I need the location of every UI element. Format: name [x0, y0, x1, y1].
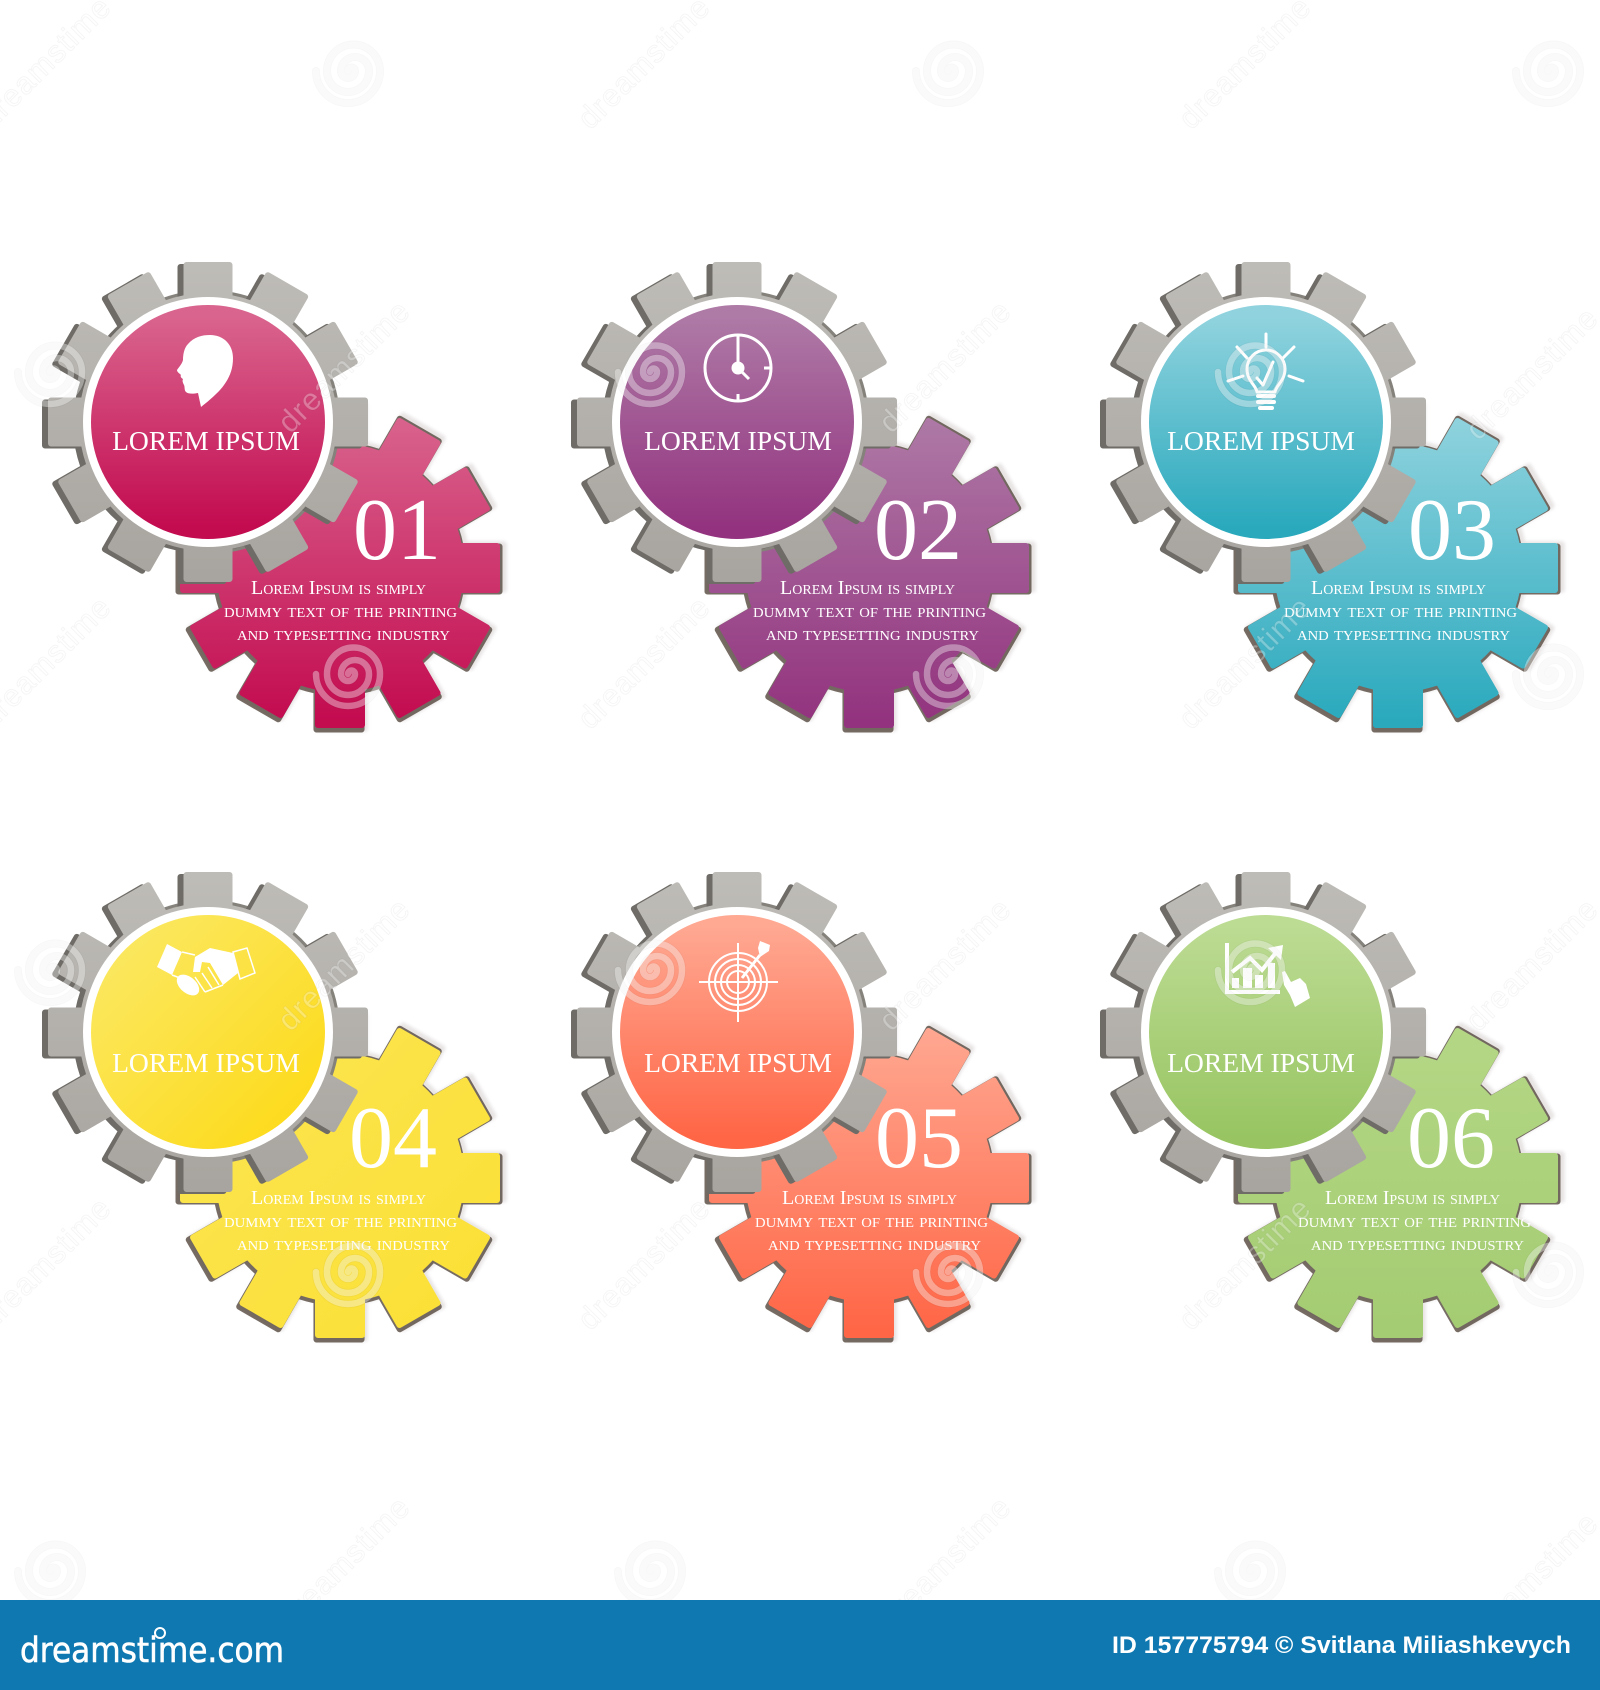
watermark text: dreamstime	[1172, 1190, 1318, 1337]
watermark text: dreamstime	[872, 891, 1018, 1038]
description 01: Lorem Ipsum is simply	[251, 577, 426, 599]
circle 02	[620, 305, 854, 539]
icon: head	[177, 335, 233, 407]
number 05: 05	[875, 1090, 963, 1187]
small gear 03	[1234, 405, 1566, 732]
description 06: Lorem Ipsum is simply	[1325, 1187, 1500, 1209]
icon: target	[699, 941, 778, 1022]
panel: step 04	[32, 862, 517, 1353]
description 04: and typesetting industry	[237, 1233, 450, 1255]
description 04: dummy text of the printing	[224, 1210, 457, 1232]
circle 06	[1149, 915, 1383, 1149]
icon: handshake	[157, 944, 255, 999]
description 03	[1284, 577, 1517, 645]
small gear 06	[1234, 1015, 1566, 1342]
large gear 01	[32, 252, 378, 594]
description 01	[224, 577, 457, 645]
description 03: Lorem Ipsum is simply	[1311, 577, 1486, 599]
heading 05: LOREM IPSUM	[644, 1047, 832, 1078]
number 03: 03	[1408, 482, 1496, 579]
large gear 02	[561, 252, 907, 594]
description 01: dummy text of the printing	[224, 600, 457, 622]
number 04: 04	[349, 1090, 437, 1187]
large gear 03	[1090, 252, 1436, 594]
description 05	[755, 1187, 988, 1255]
large gear 04	[32, 862, 378, 1204]
number 01: 01	[353, 482, 441, 579]
number 06: 06	[1407, 1090, 1495, 1187]
panel: step 03	[1090, 252, 1575, 743]
watermark text: dreamstime	[571, 589, 717, 736]
circle 01	[91, 305, 325, 539]
description 01: and typesetting industry	[237, 623, 450, 645]
heading 01: LOREM IPSUM	[112, 425, 300, 456]
number 02: 02	[874, 482, 962, 579]
circle 03	[1149, 305, 1383, 539]
watermark text: dreamstime	[1172, 589, 1318, 736]
icon: chart with hand	[1227, 943, 1310, 1007]
description 02: and typesetting industry	[766, 623, 979, 645]
watermark text: dreamstime	[872, 293, 1018, 440]
description 03: and typesetting industry	[1297, 623, 1510, 645]
small gear 01	[176, 405, 508, 732]
small gear 05	[704, 1015, 1036, 1342]
description 02: Lorem Ipsum is simply	[780, 577, 955, 599]
description 02	[753, 577, 986, 645]
heading 03: LOREM IPSUM	[1167, 425, 1355, 456]
description 05: Lorem Ipsum is simply	[782, 1187, 957, 1209]
panel: step 06	[1090, 862, 1575, 1353]
watermark text: dreamstime	[571, 1190, 717, 1337]
panel: step 05	[561, 862, 1046, 1353]
large gear 05	[561, 862, 907, 1204]
description 06	[1298, 1187, 1531, 1255]
icon: clock	[705, 335, 771, 401]
description 04	[224, 1187, 457, 1255]
heading 06: LOREM IPSUM	[1167, 1047, 1355, 1078]
logo: dreamstime.com	[20, 1631, 284, 1671]
watermark text: dreamstime	[271, 891, 417, 1038]
description 05: and typesetting industry	[768, 1233, 981, 1255]
heading 04: LOREM IPSUM	[112, 1047, 300, 1078]
watermark text: dreamstime	[271, 1489, 417, 1636]
footer banner	[0, 1600, 1600, 1690]
description 02: dummy text of the printing	[753, 600, 986, 622]
icon: light bulb	[1228, 334, 1303, 408]
circle 05	[620, 915, 854, 1149]
description 06: dummy text of the printing	[1298, 1210, 1531, 1232]
description 04: Lorem Ipsum is simply	[251, 1187, 426, 1209]
large gear 06	[1090, 862, 1436, 1204]
watermark text: dreamstime	[271, 293, 417, 440]
description 03: dummy text of the printing	[1284, 600, 1517, 622]
small gear 02	[704, 405, 1036, 732]
panel: step 02	[561, 252, 1046, 743]
circle 04	[91, 915, 325, 1149]
watermark text: dreamstime	[872, 1489, 1018, 1636]
heading 02: LOREM IPSUM	[644, 425, 832, 456]
description 05: dummy text of the printing	[755, 1210, 988, 1232]
description 06: and typesetting industry	[1311, 1233, 1524, 1255]
small gear 04	[176, 1015, 508, 1342]
panel: step 01	[32, 252, 517, 743]
image credit: ID 157775794 © Svitlana Miliashkevych	[1112, 1632, 1571, 1659]
